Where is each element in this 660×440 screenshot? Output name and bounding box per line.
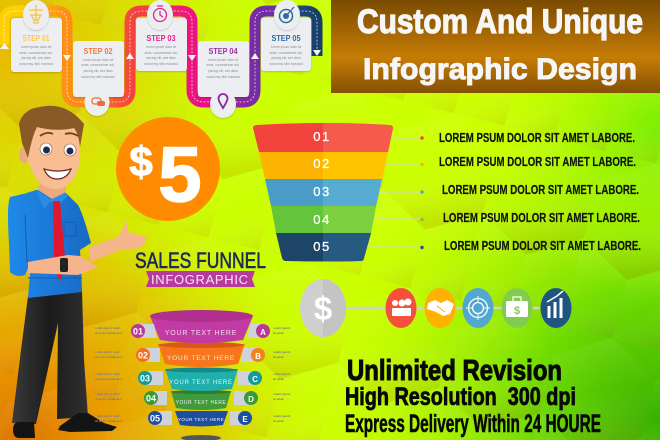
step 01 card: Lorem ipsum dolor sit (21, 45, 51, 49)
right captions: sit amet (273, 397, 284, 401)
sales funnel heading (135, 248, 266, 287)
right letter tabs: C (252, 375, 258, 384)
right captions: sit amet (273, 331, 284, 335)
step 05 card: piscing elit, sed diam (271, 56, 301, 60)
shirt (8, 190, 91, 298)
layer 4: YOUR TEXT HERE (176, 400, 227, 406)
step 01 card: amet, consectetuer adi- (19, 51, 53, 55)
heading text: SALES FUNNEL (135, 248, 266, 273)
left captions: Lorem ipsum dolor (95, 414, 120, 418)
funnel level 04 (271, 206, 376, 233)
funnel captions (439, 130, 641, 253)
step 04 card: amet, consectetuer adi- (206, 63, 240, 67)
unlimited revision: Unlimited Revision (347, 355, 562, 387)
step 01 card (11, 18, 62, 72)
left captions: sit amet consectetur (95, 331, 122, 335)
icon: map pin (210, 90, 236, 118)
icon: handshake (424, 288, 456, 328)
layer 2 (158, 342, 245, 367)
left captions: sit amet consectetur (95, 419, 122, 423)
step 01 card: piscing elit, sed diam (21, 56, 51, 60)
left captions (95, 326, 122, 423)
step ribbon (4, 11, 317, 102)
right letter tabs: E (242, 415, 248, 424)
layer 3: YOUR TEXT HERE (169, 380, 233, 386)
layer 2: YOUR TEXT HERE (167, 355, 235, 362)
icon: light bulb (23, 0, 49, 30)
icon: briefcase (502, 288, 532, 328)
face (27, 128, 80, 189)
panel: icon row (300, 279, 572, 337)
icon: stopwatch (147, 0, 173, 30)
icon: chat bubbles (84, 88, 110, 116)
left captions: sit amet consectetur (95, 377, 122, 381)
layer 3 (165, 368, 238, 391)
right captions: sit amet (273, 355, 284, 359)
right letter tabs: B (255, 352, 261, 361)
right letter tabs: A (260, 328, 266, 337)
step 04 card: Lorem ipsum dolor sit (208, 58, 238, 62)
panel: flat five level funnel (253, 123, 641, 262)
left number tabs: 02 (138, 350, 148, 360)
icon: growth chart (540, 288, 572, 328)
dollar sign: $ (129, 138, 153, 185)
eyes (40, 143, 76, 156)
arrowheads (0, 43, 321, 61)
connector lines (366, 138, 421, 247)
tie (53, 201, 65, 281)
step 05 card: Lorem ipsum dolor sit (271, 45, 301, 49)
funnel level 03: 03 (313, 184, 331, 199)
layer 5 (175, 411, 228, 426)
hair (19, 106, 84, 158)
funnel level 01 (253, 123, 393, 152)
icon: dollar circle (300, 279, 346, 337)
header banner (331, 0, 660, 93)
right captions: Lorem ipsum (273, 414, 291, 418)
left captions: sit amet consectetur (95, 355, 122, 359)
funnel level 03 (265, 179, 382, 206)
step 01 card: nonummy nibh euismod (19, 62, 53, 66)
title line 2: Infographic Design (363, 53, 637, 86)
layer 1: YOUR TEXT HERE (165, 330, 237, 337)
step 02 card: Lorem ipsum dolor sit (83, 58, 113, 62)
icon: target (462, 288, 494, 328)
step 02 card (73, 41, 124, 97)
step 05 card (261, 18, 311, 71)
right captions: Lorem ipsum (273, 392, 291, 396)
step 03 card (136, 18, 187, 71)
funnel level 04: 04 (313, 212, 331, 227)
layer 4 (171, 390, 231, 410)
ribbon text: INFOGRAPHIC (151, 272, 248, 287)
right captions: sit amet (273, 377, 284, 381)
panel: five step process timeline (0, 0, 321, 118)
neck (38, 180, 66, 199)
right captions: Lorem ipsum (273, 326, 291, 330)
smile (44, 169, 71, 179)
icon: team (386, 288, 416, 328)
shirt fold details (25, 215, 82, 278)
funnel base (181, 435, 221, 440)
step 05 card: amet, consectetuer adi- (269, 51, 303, 55)
shoes (13, 413, 117, 438)
price badge (116, 117, 220, 221)
step 02 card: STEP 02 (84, 47, 113, 56)
right captions: sit amet (273, 419, 284, 423)
watch (60, 258, 68, 272)
funnel level 01: 01 (313, 129, 331, 144)
funnel level 02 (259, 152, 388, 179)
step 02 card: nonummy nibh euismod (81, 75, 115, 79)
ribbon label (146, 271, 255, 287)
ear (19, 147, 29, 163)
step 03 card: amet, consectetuer adi- (144, 51, 178, 55)
layer 5: YOUR TEXT HERE (178, 417, 224, 422)
icon: dollar circle: $ (314, 290, 332, 327)
arm pointing at funnel (90, 220, 147, 262)
icon: target (274, 0, 300, 30)
right captions: Lorem ipsum (273, 350, 291, 354)
step 01 card: STEP 01 (22, 34, 50, 43)
service promises text (345, 355, 601, 438)
step 05 card: STEP 05 (272, 34, 301, 43)
left number tabs: 05 (150, 414, 160, 424)
step 04 card: STEP 04 (208, 47, 238, 56)
high resolution: High Resolution 300 dpi (345, 383, 576, 411)
step 03 card: Lorem ipsum dolor sit (146, 45, 176, 49)
folded forearm and hand (28, 255, 98, 275)
step 02 card: amet, consectetuer adi- (81, 63, 115, 67)
left number tabs: 04 (146, 394, 156, 404)
step 02 card: piscing elit, sed diam (83, 69, 113, 73)
layer 1 (150, 310, 253, 343)
step 03 card: STEP 03 (146, 34, 176, 43)
connector line (346, 307, 540, 309)
price number: 5 (158, 130, 202, 218)
left captions: Lorem ipsum dolor (95, 350, 120, 354)
figure: businessman (8, 106, 147, 438)
step 03 card: piscing elit, sed diam (146, 56, 176, 60)
icon: briefcase: $ (514, 305, 520, 317)
step 03 card: nonummy nibh euismod (144, 62, 178, 66)
right letter tabs (230, 324, 270, 425)
funnel level 02: 02 (313, 156, 331, 171)
step 04 card: nonummy nibh euismod (206, 75, 240, 79)
left captions: sit amet consectetur (95, 397, 122, 401)
left number tabs (131, 324, 172, 425)
right captions (273, 326, 291, 423)
right captions: Lorem ipsum (273, 372, 291, 376)
left number tabs: 03 (140, 374, 150, 384)
step 05 card: nonummy nibh euismod (269, 62, 303, 66)
funnel level 05: 05 (313, 239, 331, 254)
funnel level 05 (276, 233, 371, 262)
step 04 card (198, 41, 249, 97)
left number tabs: 01 (133, 326, 143, 336)
step 04 card: piscing elit, sed diam (208, 69, 238, 73)
trousers (12, 290, 88, 424)
brows (40, 133, 78, 136)
collar (36, 190, 68, 209)
left captions: Lorem ipsum dolor (95, 326, 120, 330)
panel: 3D sales funnel (95, 310, 291, 440)
right letter tabs: D (248, 395, 254, 404)
left captions: Lorem ipsum dolor (95, 372, 120, 376)
connector dots (420, 136, 424, 249)
left captions: Lorem ipsum dolor (95, 392, 120, 396)
